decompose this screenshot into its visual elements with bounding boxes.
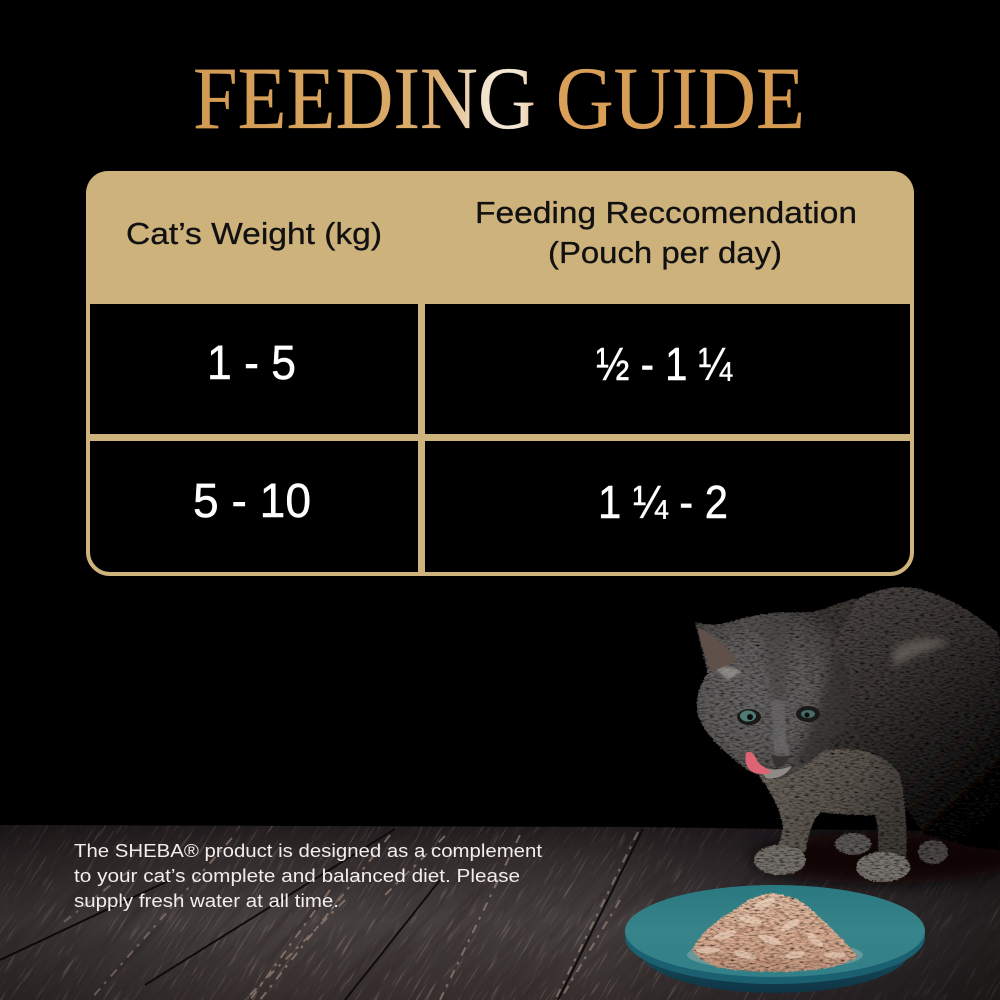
plate face <box>625 885 925 977</box>
cat body <box>790 587 1000 850</box>
cat inner ear <box>698 628 738 672</box>
disclaimer text <box>74 841 542 911</box>
cat flank highlight <box>893 639 950 668</box>
plate of food <box>625 885 925 993</box>
dividers <box>86 300 914 574</box>
floor shadow under cat <box>750 832 1000 884</box>
column heading: recommendation: Feeding Reccomendation <box>475 195 857 230</box>
disclaimer text: to your cat’s complete and balanced diet. Please <box>74 866 520 886</box>
row 1 weight: 1 - 5 <box>207 337 296 390</box>
food mound <box>692 893 857 972</box>
column heading: weight: Cat’s Weight (kg) <box>126 216 382 251</box>
plate underside <box>640 907 910 993</box>
cat illustration <box>695 587 1000 882</box>
feeding table <box>86 171 914 574</box>
rear paw <box>918 840 948 864</box>
column heading: recommendation: (Pouch per day) <box>548 235 782 270</box>
back paws <box>835 833 871 855</box>
food broth <box>687 940 863 970</box>
cat left eye <box>737 709 761 725</box>
cat head <box>695 598 857 778</box>
title: FEEDING GUIDE <box>193 50 805 148</box>
disclaimer text: supply fresh water at all time. <box>74 891 339 911</box>
cat muzzle <box>755 764 792 778</box>
cat tongue <box>745 752 772 774</box>
cat head shading <box>715 620 855 765</box>
row 2 weight: 5 - 10 <box>193 475 311 528</box>
cat chest and legs <box>755 749 907 862</box>
row 1 feeding: ½ - 1 ¼ <box>596 338 733 390</box>
cat right eye <box>796 706 820 722</box>
front paws <box>754 845 910 882</box>
row 2 feeding: 1 ¼ - 2 <box>598 476 728 528</box>
cat nose <box>771 754 790 767</box>
table frame <box>88 173 912 574</box>
plate lip <box>625 890 925 984</box>
wood floor <box>0 825 1000 1000</box>
disclaimer text: The SHEBA® product is designed as a complement <box>74 841 542 861</box>
column heading: recommendation <box>475 195 857 270</box>
table header <box>86 171 914 302</box>
